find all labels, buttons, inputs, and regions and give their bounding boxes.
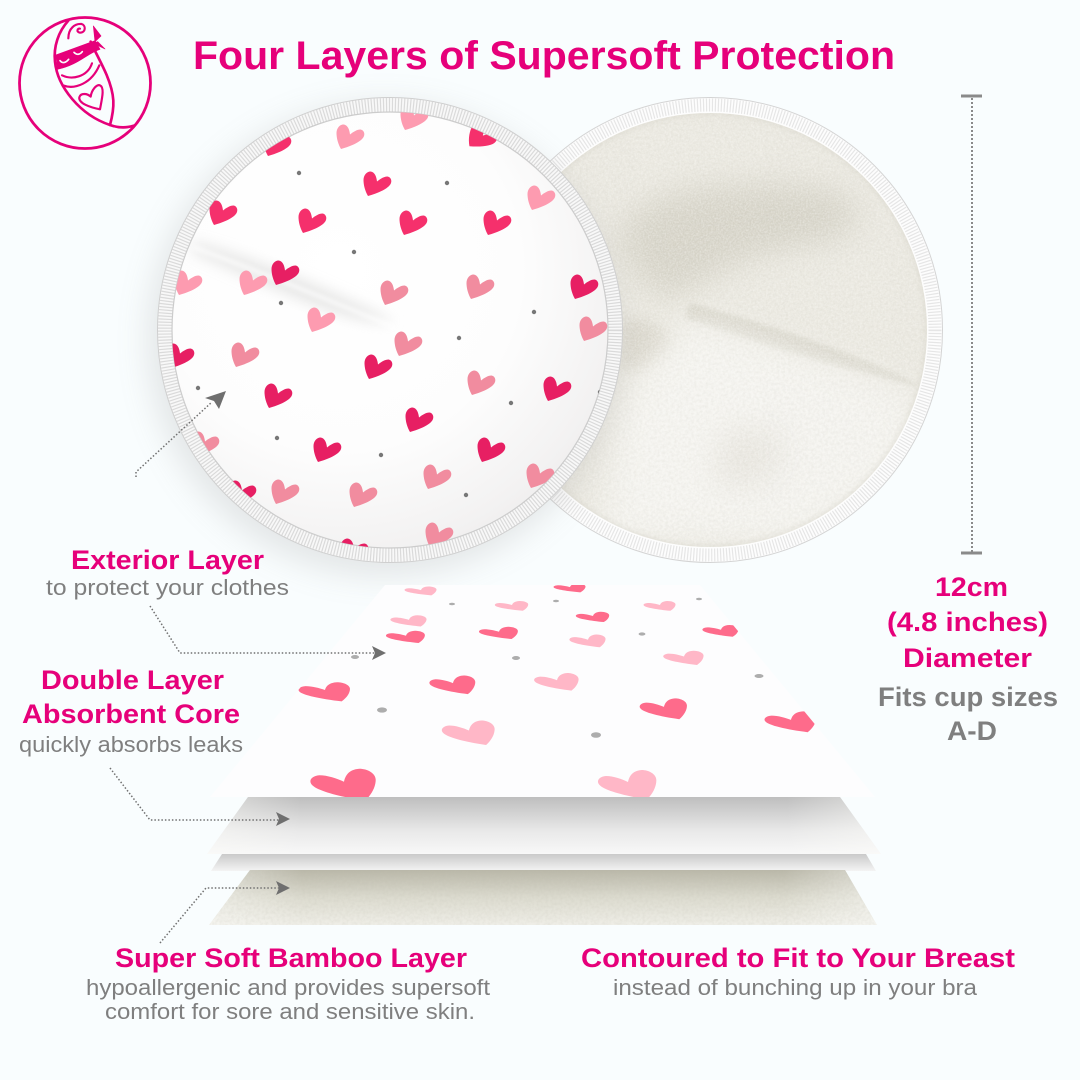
- label: diameter and cup sizes: Diameter: [903, 643, 1033, 673]
- arrow: to bamboo layer: [160, 881, 290, 943]
- label: diameter and cup sizes: [878, 572, 1058, 746]
- title: Four Layers of Supersoft Protection: [193, 34, 895, 78]
- diagram: exterior hearts layer: [298, 585, 814, 797]
- panel: hearts side nursing pad: [148, 98, 622, 576]
- logo: swaddled baby ninja: [20, 18, 150, 148]
- label: super soft bamboo layer: hypoallergenic and provides supersoft: [86, 975, 490, 1000]
- label: exterior layer: [46, 545, 289, 600]
- label: super soft bamboo layer: comfort for sore and sensitive skin.: [105, 999, 475, 1024]
- label: double layer absorbent core: Absorbent Core: [22, 699, 240, 729]
- diagram: absorbent core layer two: [211, 854, 876, 871]
- fold crease: [196, 242, 382, 324]
- pattern: grey dots: [196, 171, 602, 497]
- label: super soft bamboo layer: [86, 943, 490, 1024]
- label: diameter and cup sizes: (4.8 inches): [887, 607, 1048, 637]
- diagram: absorbent core layer one: [207, 797, 881, 854]
- label: diameter and cup sizes: A-D: [947, 716, 997, 746]
- label: contoured to fit: instead of bunching up in your bra: [613, 975, 978, 1000]
- label: double layer absorbent core: [19, 665, 243, 757]
- arrow: to exterior layer: [150, 606, 386, 660]
- label: diameter and cup sizes: Fits cup sizes: [878, 682, 1058, 712]
- label: contoured to fit: [581, 943, 1015, 1000]
- label: exterior layer: to protect your clothes: [46, 575, 289, 600]
- panel: bamboo side nursing pad: [550, 97, 943, 563]
- arrow: to absorbent core: [110, 768, 290, 826]
- label: contoured to fit: Contoured to Fit to Your Breast: [581, 943, 1015, 973]
- pattern: light hearts: [174, 106, 555, 332]
- label: super soft bamboo layer: Super Soft Bamboo Layer: [115, 943, 468, 973]
- label: double layer absorbent core: Double Layer: [41, 665, 225, 695]
- label: exterior layer: Exterior Layer: [71, 545, 265, 575]
- diagram: bamboo layer: [205, 868, 885, 928]
- dimension line: [961, 96, 982, 553]
- label: double layer absorbent core: quickly absorbs leaks: [19, 732, 243, 757]
- arrow: to pad exterior: [136, 391, 226, 477]
- pattern: dark hearts: [210, 122, 511, 235]
- label: diameter and cup sizes: 12cm: [935, 572, 1008, 602]
